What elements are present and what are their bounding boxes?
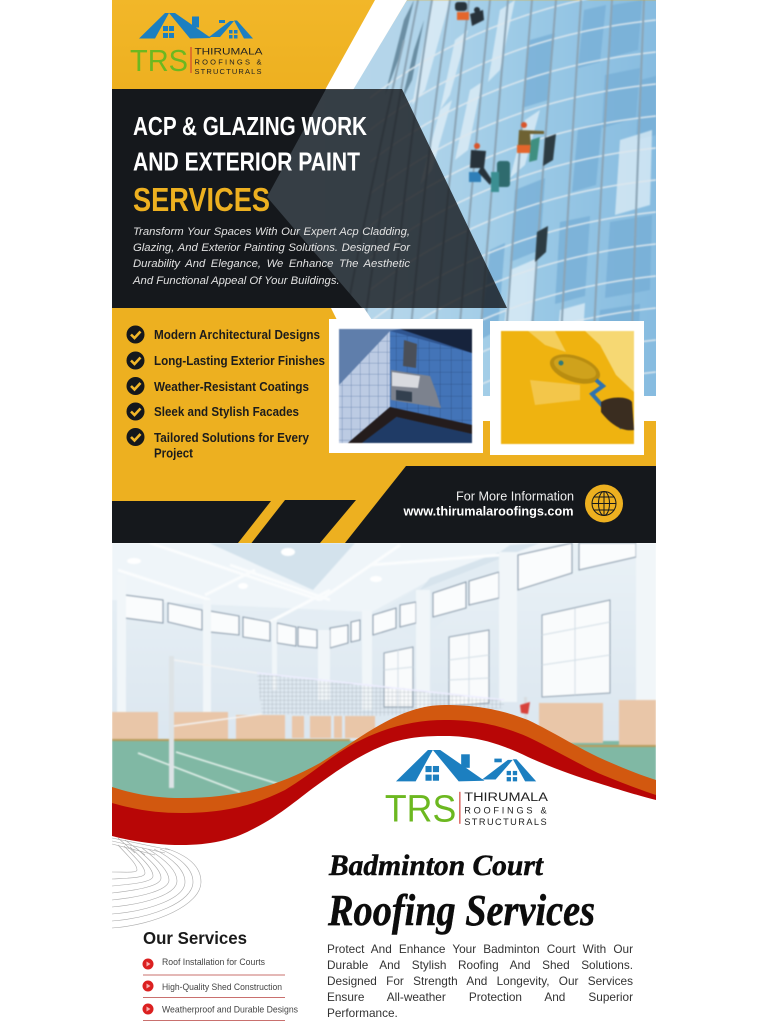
orange wave [112, 705, 656, 1024]
logo: Thirumala Roofings and Structurals: ROOFINGS & [194, 58, 262, 66]
heading: Badminton Court Roofing Services [327, 849, 595, 935]
check item 5 [126, 428, 309, 460]
wireframe mesh decoration [112, 838, 201, 928]
logo: Thirumala Roofings and Structurals: STRUCTURALS [194, 67, 262, 76]
title: SERVICES [133, 181, 270, 218]
service item 2: High-Quality Shed Construction [162, 982, 282, 993]
footer right dark band [345, 466, 656, 543]
white diagonal stripe [325, 0, 407, 90]
columns [117, 543, 656, 712]
check item 1: Modern Architectural Designs [154, 328, 320, 342]
check item 4: Sleek and Stylish Facades [154, 405, 299, 419]
our services list [142, 928, 298, 1021]
service item 2 [142, 980, 285, 998]
logo: Thirumala Roofings and Structurals: THIRUMALA [464, 791, 548, 804]
roofing description paragraph: Protect And Enhance Your Badminton Court With Our [327, 942, 633, 956]
check item 2 [126, 352, 325, 370]
upper windows [125, 543, 636, 648]
wood wall panels [112, 700, 656, 747]
contact text: www.thirumalaroofings.com [403, 504, 574, 518]
logo: Thirumala Roofings and Structurals: STRUCTURALS [464, 817, 547, 827]
translucent dark hexagon over photo [264, 89, 507, 308]
solid dark banner [112, 89, 362, 308]
intro paragraph: Durability And Elegance, We Enhance The Aesthetic [133, 258, 410, 270]
footer left dark bars [112, 501, 271, 543]
logo: Thirumala Roofings and Structurals: THIRUMALA [194, 46, 263, 58]
service item 3: Weatherproof and Durable Designs [162, 1004, 298, 1016]
title: ACP & GLAZING WORK [133, 111, 367, 141]
check item 1 [126, 326, 320, 344]
logo: Thirumala Roofings and Structurals: TRS [130, 43, 188, 78]
roofing description paragraph: Durable And Stylish Roofing And Shed Solutions. [327, 958, 633, 972]
contact text [403, 488, 574, 518]
logo: Thirumala Roofings and Structurals [130, 13, 263, 78]
roofing description paragraph: Ensure All-weather Protection And Superior [327, 990, 633, 1004]
logo: Thirumala Roofings and Structurals: ROOFINGS & [464, 805, 547, 815]
photo frame: paint roller on yellow wall [490, 321, 644, 455]
panel: badminton court roofing services [112, 543, 656, 1024]
logo: Thirumala Roofings and Structurals [385, 750, 548, 830]
lower windows [384, 600, 610, 707]
intro paragraph: Glazing, And Exterior Painting Solutions. Designed For [133, 242, 410, 254]
intro paragraph: Transform Your Spaces With Our Expert Acp Cladding, [133, 226, 410, 238]
check item 5: Tailored Solutions for Every [154, 431, 309, 445]
photo: indoor court hall [112, 543, 656, 811]
yellow header background [112, 0, 392, 90]
panel: ACP and glazing services [112, 0, 656, 543]
icon: globe [585, 484, 623, 522]
net [257, 673, 504, 716]
check item 2: Long-Lasting Exterior Finishes [154, 354, 325, 368]
service item 1: Roof Installation for Courts [162, 957, 265, 968]
open windows [543, 134, 556, 166]
intro paragraph: And Functional Appeal Of Your Buildings. [133, 275, 340, 287]
photo: glass building with rope-access workers [267, 0, 656, 396]
white wave body [112, 736, 656, 1024]
floor [112, 741, 656, 811]
roofing description paragraph: Performance. [327, 1006, 398, 1020]
heading: Badminton Court Roofing Services: Badminton Court [328, 849, 545, 882]
feature list [126, 326, 325, 460]
heading: Badminton Court Roofing Services: Roofing Services [327, 886, 595, 935]
roofing description paragraph: Designed For Strength And Longevity, Our Services [327, 974, 633, 988]
title [133, 111, 367, 218]
roofing description paragraph [327, 942, 633, 1020]
title: AND EXTERIOR PAINT [133, 146, 360, 176]
check item 4 [126, 402, 299, 420]
red wave [112, 720, 656, 1024]
check item 3 [126, 377, 309, 395]
check item 3: Weather-Resistant Coatings [154, 380, 309, 394]
service item 3 [142, 1004, 298, 1021]
intro paragraph [132, 226, 410, 287]
our services list: Our Services [143, 928, 247, 948]
photo frame: glass corner building [329, 319, 483, 453]
court lines [138, 752, 285, 792]
logo: Thirumala Roofings and Structurals: TRS [385, 787, 456, 830]
ceiling [112, 543, 560, 612]
white band beneath photo [470, 396, 656, 421]
net post [169, 656, 174, 788]
contact text: For More Information [456, 488, 574, 504]
check item 5: Project [154, 446, 194, 460]
workers [455, 2, 544, 192]
service item 1 [142, 957, 285, 976]
